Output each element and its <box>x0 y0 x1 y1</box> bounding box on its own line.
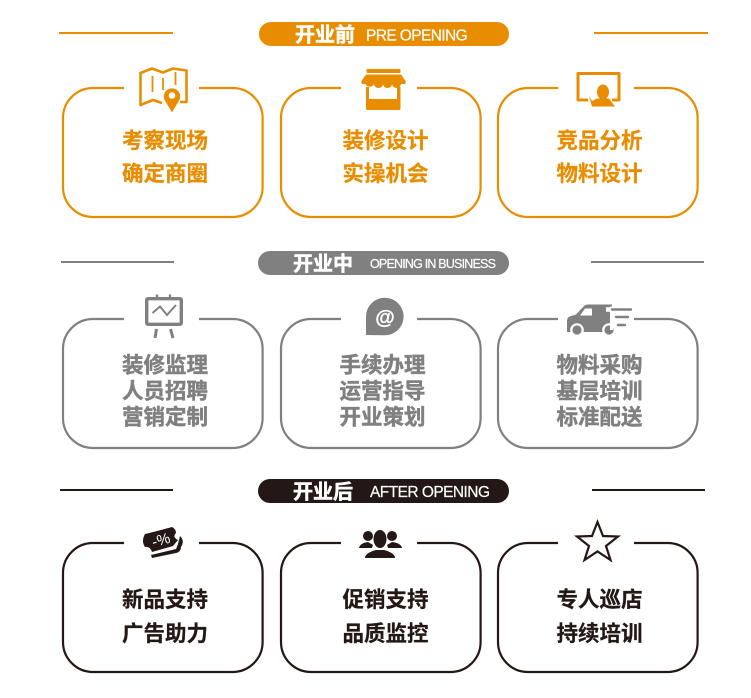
panel: decoration design: 实操机会 <box>342 161 429 186</box>
text: paperwork lines: 手续办理 <box>339 354 426 378</box>
panel: promotion <box>281 530 481 672</box>
panel: procurement <box>498 304 698 448</box>
header pill: after opening: AFTER OPENING <box>370 484 489 501</box>
panel: site survey <box>63 68 263 217</box>
panel: store visits: 持续培训 <box>556 622 643 646</box>
icon: group of people <box>359 530 402 558</box>
panel: paperwork: 开业策划 <box>339 406 426 430</box>
panel: new products <box>63 527 263 672</box>
header pill: in business <box>258 251 509 276</box>
icon: at-sign bubble: @ <box>375 307 395 329</box>
header pill: in business: OPENING IN BUSINESS <box>370 257 496 271</box>
header pill: in business: 开业中 <box>293 252 353 276</box>
panel: decoration design <box>281 69 481 217</box>
panel: promotion: 品质监控 <box>342 622 429 646</box>
panel: competitor analysis <box>498 74 698 217</box>
icon: discount coupons <box>143 527 183 558</box>
section: in business <box>61 251 704 448</box>
icon: storefront <box>361 69 406 110</box>
icon: delivery van <box>567 304 631 337</box>
panel: competitor analysis: 物料设计 <box>556 162 643 186</box>
icon: map with pin <box>140 68 186 113</box>
header pill: after opening <box>258 479 509 504</box>
icon: star outline <box>577 522 618 560</box>
panel: paperwork: 运营指导 <box>339 380 426 404</box>
icon: at-sign bubble <box>366 298 404 335</box>
header pill: pre opening <box>259 22 509 46</box>
icon: chart board <box>147 294 181 338</box>
panel: supervision <box>63 294 263 448</box>
header pill: pre opening: PRE OPENING <box>366 28 467 44</box>
header pill: pre opening: 开业前 <box>295 24 355 46</box>
panel: procurement: 标准配送 <box>556 406 643 430</box>
text: survey lines: 考察现场 <box>122 129 208 153</box>
text: promotion lines: 促销支持 <box>342 588 429 612</box>
text: new product lines: 新品支持 <box>122 588 208 612</box>
panel: new products: 广告助力 <box>122 622 208 646</box>
icon: presenter screen <box>578 74 619 106</box>
header pill: after opening: 开业后 <box>293 480 353 504</box>
text: analysis lines: 竞品分析 <box>556 129 643 153</box>
panel: store visits <box>498 522 698 672</box>
panel: procurement: 基层培训 <box>556 380 643 404</box>
icon: discount coupons: -% <box>150 530 172 551</box>
text: supervision lines: 装修监理 <box>122 354 208 378</box>
text: procurement lines: 物料采购 <box>556 354 643 378</box>
section: after opening <box>60 479 705 672</box>
section: pre opening <box>59 22 708 217</box>
panel: paperwork <box>281 298 481 448</box>
text: visit lines: 专人巡店 <box>556 588 643 612</box>
panel: supervision: 人员招聘 <box>122 380 208 404</box>
panel: supervision: 营销定制 <box>122 404 208 430</box>
panel: site survey: 确定商圈 <box>122 161 208 186</box>
text: decoration lines: 装修设计 <box>342 129 429 153</box>
